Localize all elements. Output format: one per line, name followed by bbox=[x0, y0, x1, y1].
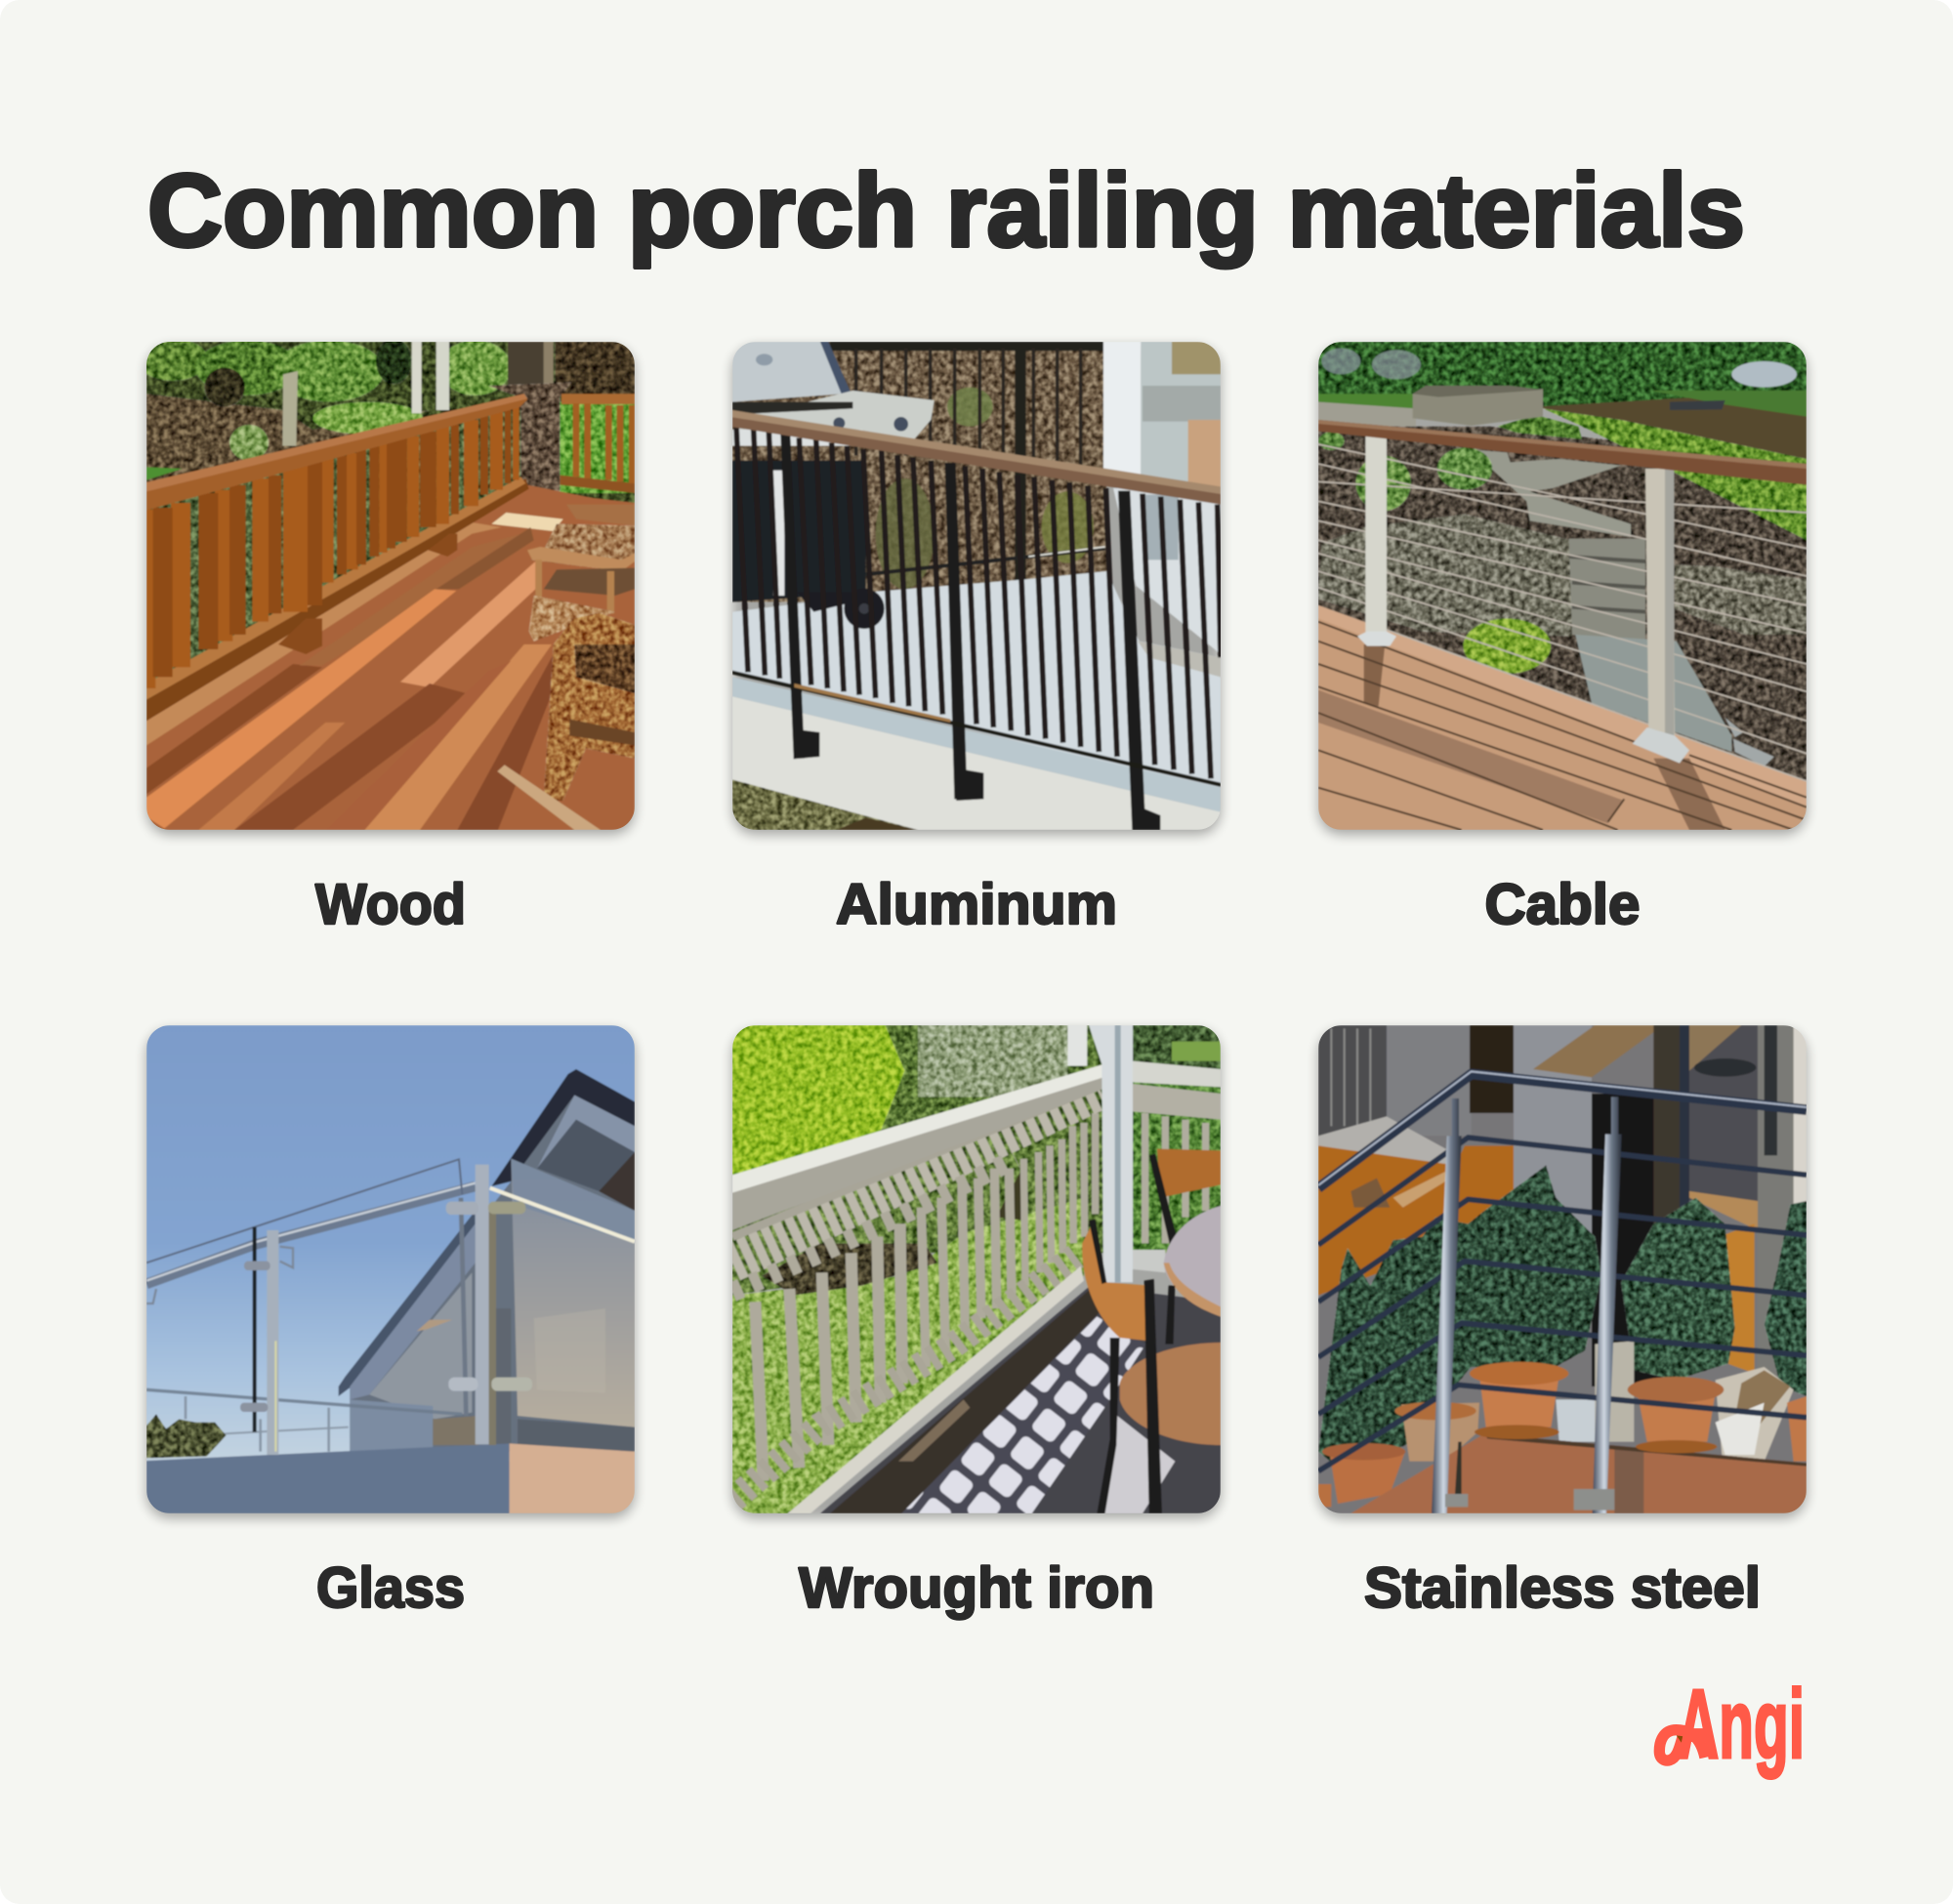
photo: aluminum railing bbox=[732, 342, 1221, 830]
panel: wood bbox=[137, 339, 635, 936]
panel: glass bbox=[146, 1025, 635, 1620]
photo: wood railing deck bbox=[146, 342, 635, 830]
label: stainless steel: Stainless steel bbox=[1364, 1556, 1761, 1620]
label: cable: Cable bbox=[1484, 873, 1641, 936]
photo: cable railing bbox=[1318, 342, 1807, 830]
label: aluminum: Aluminum bbox=[836, 873, 1117, 936]
label: wood: Wood bbox=[315, 873, 466, 936]
panel: stainless steel bbox=[1318, 1025, 1807, 1620]
label: wrought iron: Wrought iron bbox=[799, 1556, 1154, 1620]
label: glass: Glass bbox=[316, 1556, 465, 1620]
photo: glass railing bbox=[146, 1025, 635, 1513]
panel: aluminum bbox=[732, 342, 1221, 936]
title: Common porch railing materials bbox=[147, 153, 1745, 269]
logo: Angi bbox=[1659, 1670, 1805, 1779]
panel: cable bbox=[1318, 342, 1807, 936]
panel: wrought iron bbox=[732, 1025, 1221, 1620]
photo: wrought iron railing bbox=[732, 1025, 1221, 1513]
logo: Angi: Angi bbox=[1678, 1670, 1805, 1779]
photo: stainless steel railing bbox=[1318, 1025, 1807, 1513]
